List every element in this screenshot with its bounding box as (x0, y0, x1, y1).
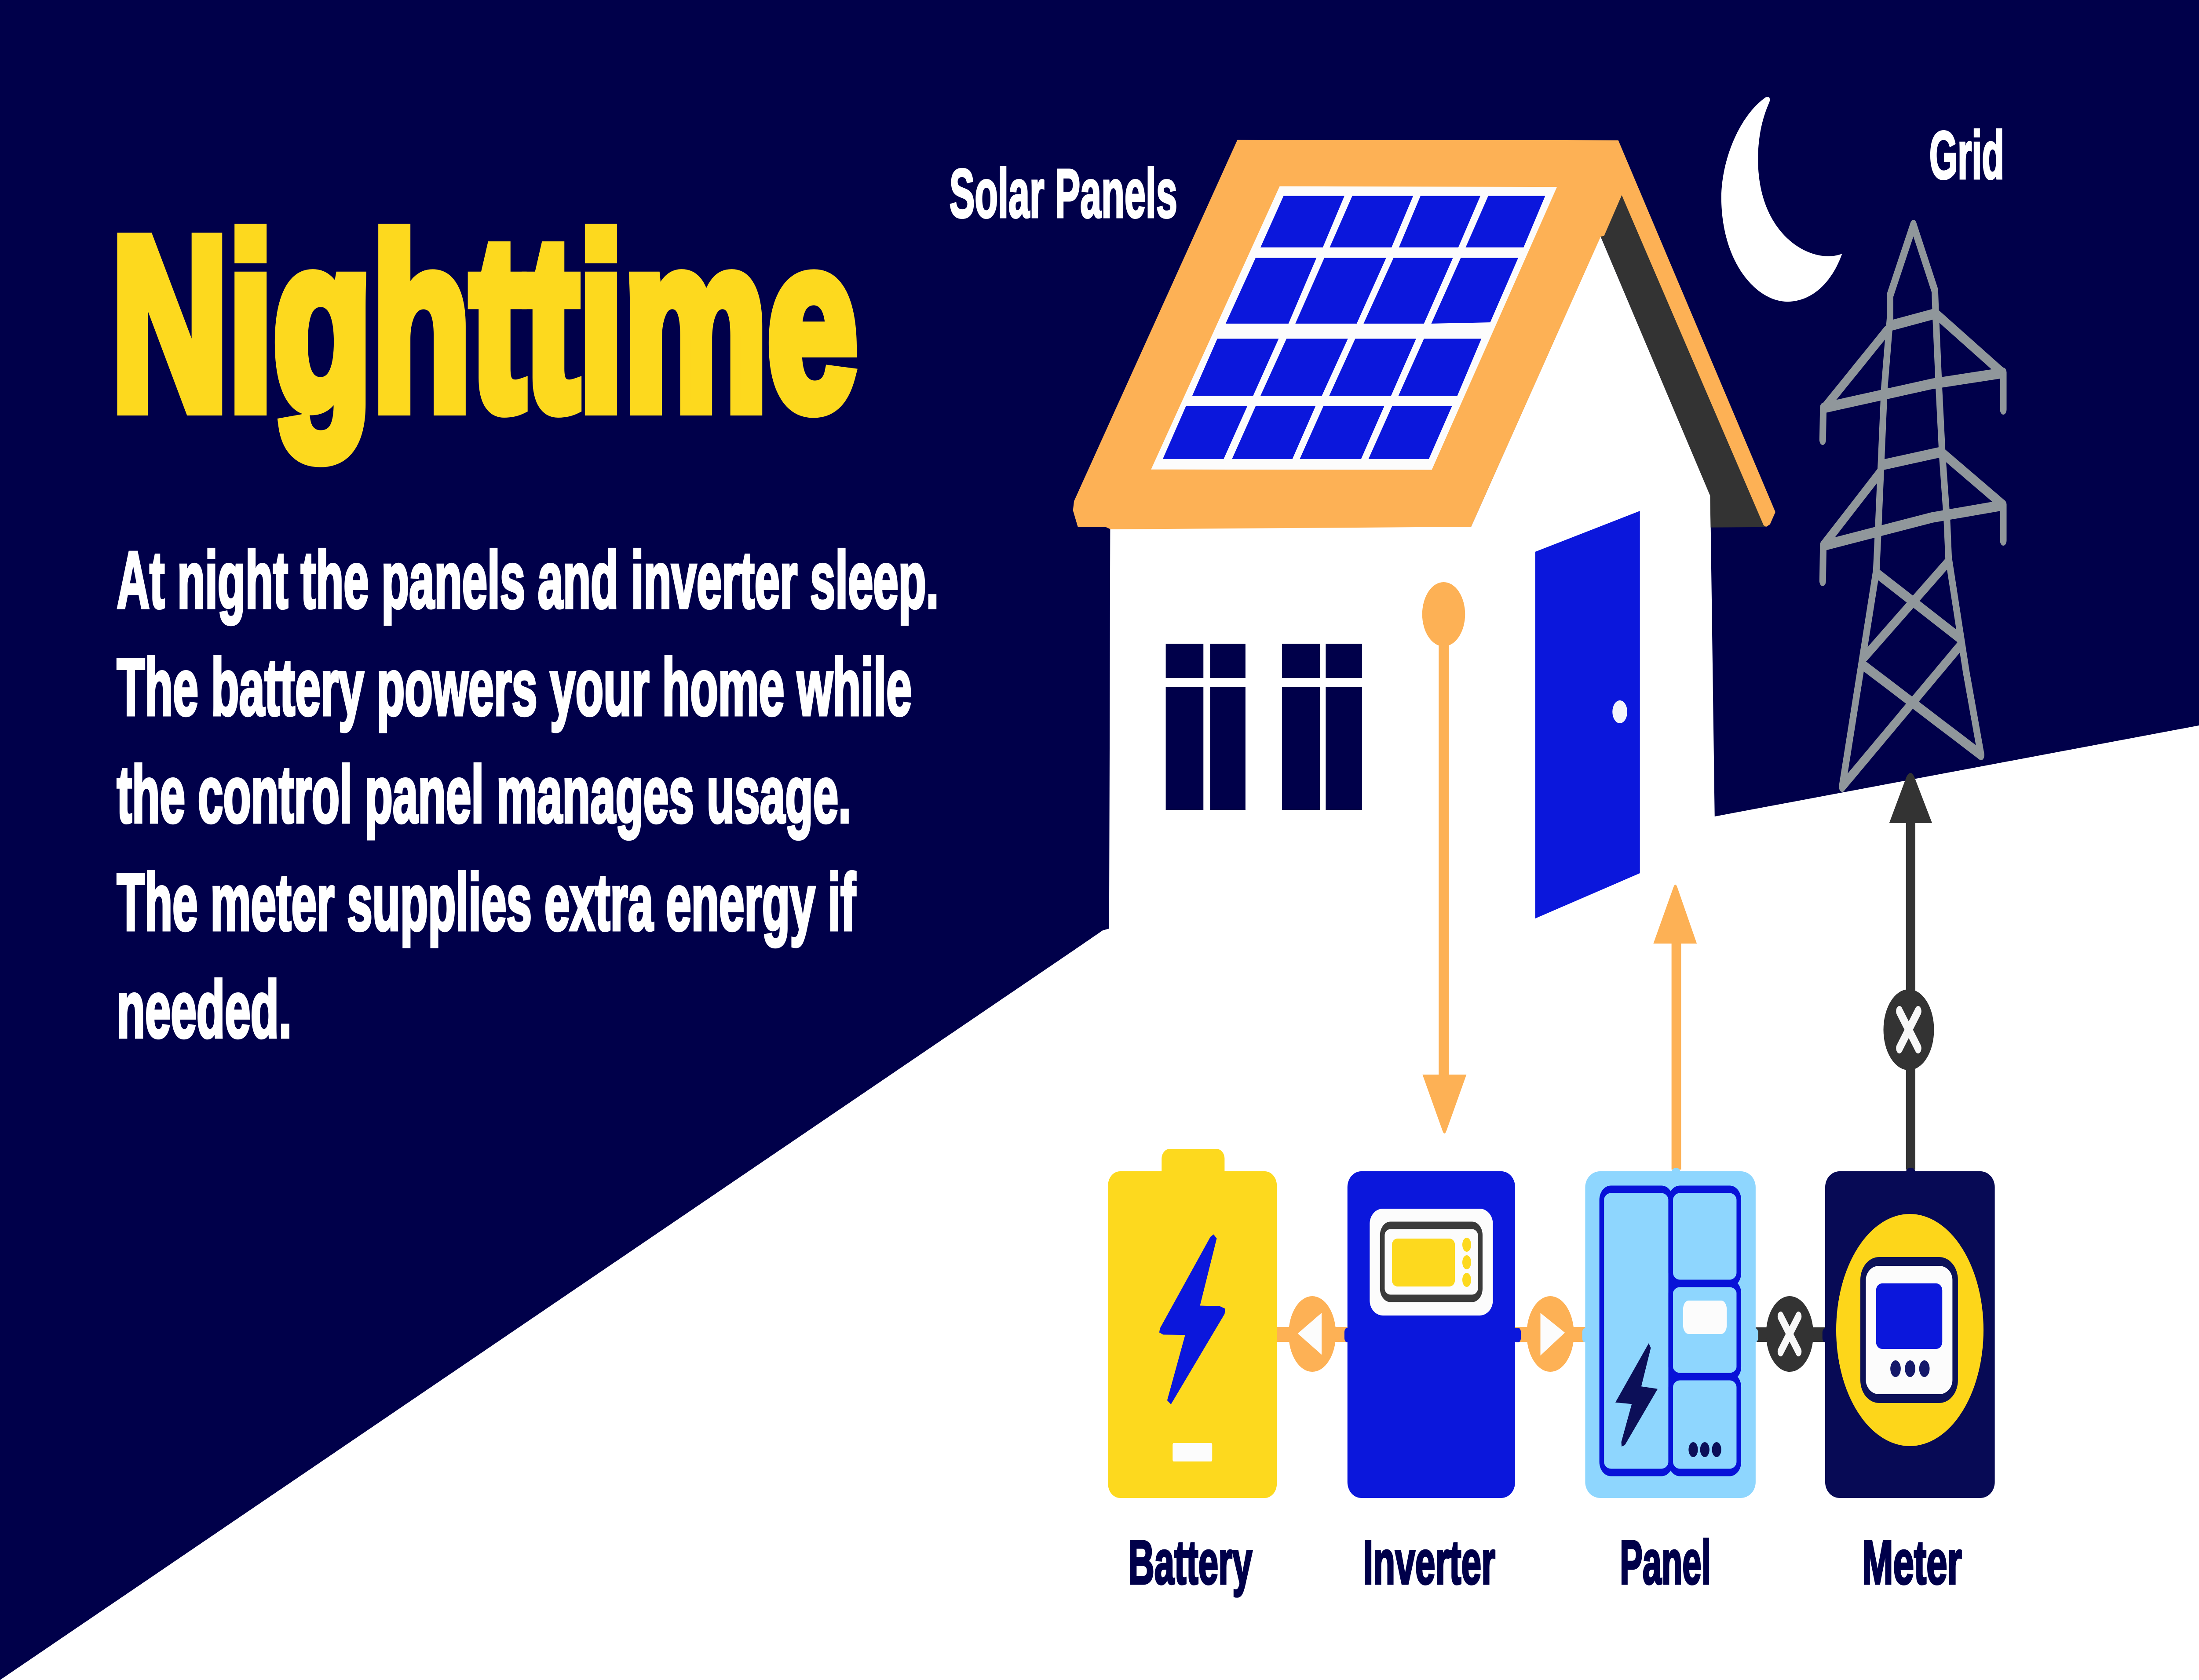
inverter display housing (1370, 1209, 1493, 1316)
inverter (1344, 1171, 1521, 1498)
inverter buttons (1462, 1238, 1471, 1287)
door knob (1612, 700, 1627, 723)
label: grid: Grid (1929, 118, 2004, 193)
solar panel cells (1163, 196, 1545, 459)
label: panel: Panel (1620, 1528, 1711, 1597)
roof with solar panels (1073, 140, 1775, 529)
roof: orange (1073, 140, 1775, 529)
battery (1108, 1149, 1277, 1498)
body text: At night the panels and inverter sleep. (117, 536, 939, 625)
windows (1166, 644, 1362, 810)
label: meter: Meter (1862, 1528, 1962, 1597)
meter screen (1876, 1283, 1942, 1349)
body text: The battery powers your home while (117, 643, 912, 732)
label: inverter: Inverter (1363, 1528, 1495, 1597)
battery indicator (1173, 1443, 1212, 1461)
arrow: home to inverter (1422, 582, 1466, 1133)
panel breakers (1602, 1189, 1739, 1472)
meter body (1863, 1261, 1955, 1399)
arrow: panel to home (1653, 885, 1697, 1170)
power tower (1823, 225, 2003, 787)
battery bolt (1159, 1234, 1225, 1404)
door (1535, 511, 1640, 918)
title: Nighttime (111, 188, 857, 461)
control panel (1582, 1168, 1758, 1498)
meter dots (1890, 1360, 1930, 1377)
body text: the control panel manages usage. (117, 750, 851, 840)
panel dots (1688, 1442, 1721, 1457)
roof: dark underside (1600, 195, 1766, 528)
moon (1721, 97, 1842, 302)
label: solar panels: Solar Panels (950, 154, 1177, 232)
panel bolt (1615, 1343, 1658, 1447)
body text: The meter supplies extra energy if (117, 858, 856, 948)
blocked marker (1883, 989, 1934, 1070)
connector: inverter to panel (1515, 1296, 1585, 1372)
arrow: meter to grid (blocked) (1883, 773, 1934, 1170)
panel display (1683, 1301, 1727, 1334)
inverter screen (1392, 1239, 1455, 1286)
inverter display (1382, 1225, 1480, 1298)
meter dial (1836, 1214, 1983, 1446)
body text: needed. (117, 965, 292, 1055)
meter (1823, 1168, 1995, 1498)
connector: battery to inverter (1277, 1296, 1348, 1372)
label: battery: Battery (1129, 1528, 1252, 1597)
connector: panel to meter (blocked) (1756, 1296, 1825, 1372)
body text (117, 536, 939, 1055)
solar panel frame (1151, 186, 1557, 470)
